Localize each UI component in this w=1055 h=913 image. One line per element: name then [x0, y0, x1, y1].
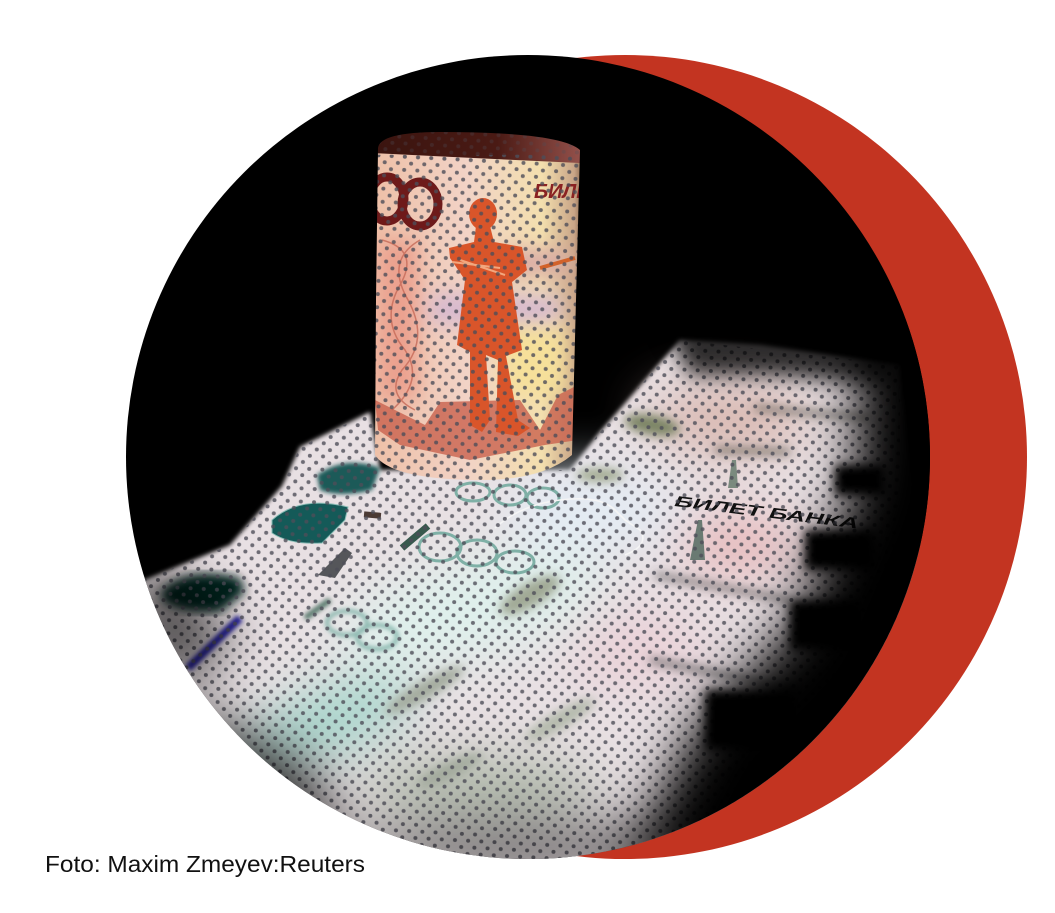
black photo circle: [126, 55, 930, 859]
zeros numerals: [370, 177, 438, 226]
bank name text on note: БИЛЕТ БАНКА: [674, 493, 859, 533]
emblem outline: [495, 499, 643, 555]
tint patches: [233, 385, 810, 825]
dark edge vignette: [139, 282, 930, 859]
red crescent circle: [223, 55, 1027, 859]
arms highlight: [452, 260, 505, 275]
lighthouse marks: [690, 520, 705, 560]
dim far edge of notes: [664, 336, 892, 396]
blue pen mark: [188, 618, 240, 668]
red ribbon: [375, 385, 578, 460]
photo: banknotes on table: [139, 132, 930, 859]
photo credit: Foto: Maxim Zmeyev:Reuters: [45, 851, 365, 877]
small dark marks: [364, 511, 381, 519]
halftone over notes: [120, 340, 900, 880]
rolled banknote: БИЛЕТ: [534, 181, 604, 203]
dark printed blocks: [705, 465, 885, 750]
blurred numerals on lower note: [305, 600, 397, 649]
banknote tint bands: [378, 240, 570, 400]
numerals 1000 on notes: [402, 483, 559, 573]
spread of banknotes: [139, 282, 930, 859]
roll inner rim: [378, 132, 580, 163]
halftone over roll: [370, 155, 585, 485]
rolled banknote: [375, 132, 580, 480]
ornament lines: [382, 240, 420, 410]
green seals: [317, 463, 380, 494]
statue figure: [449, 198, 530, 436]
blurred printed marks: [382, 408, 870, 792]
